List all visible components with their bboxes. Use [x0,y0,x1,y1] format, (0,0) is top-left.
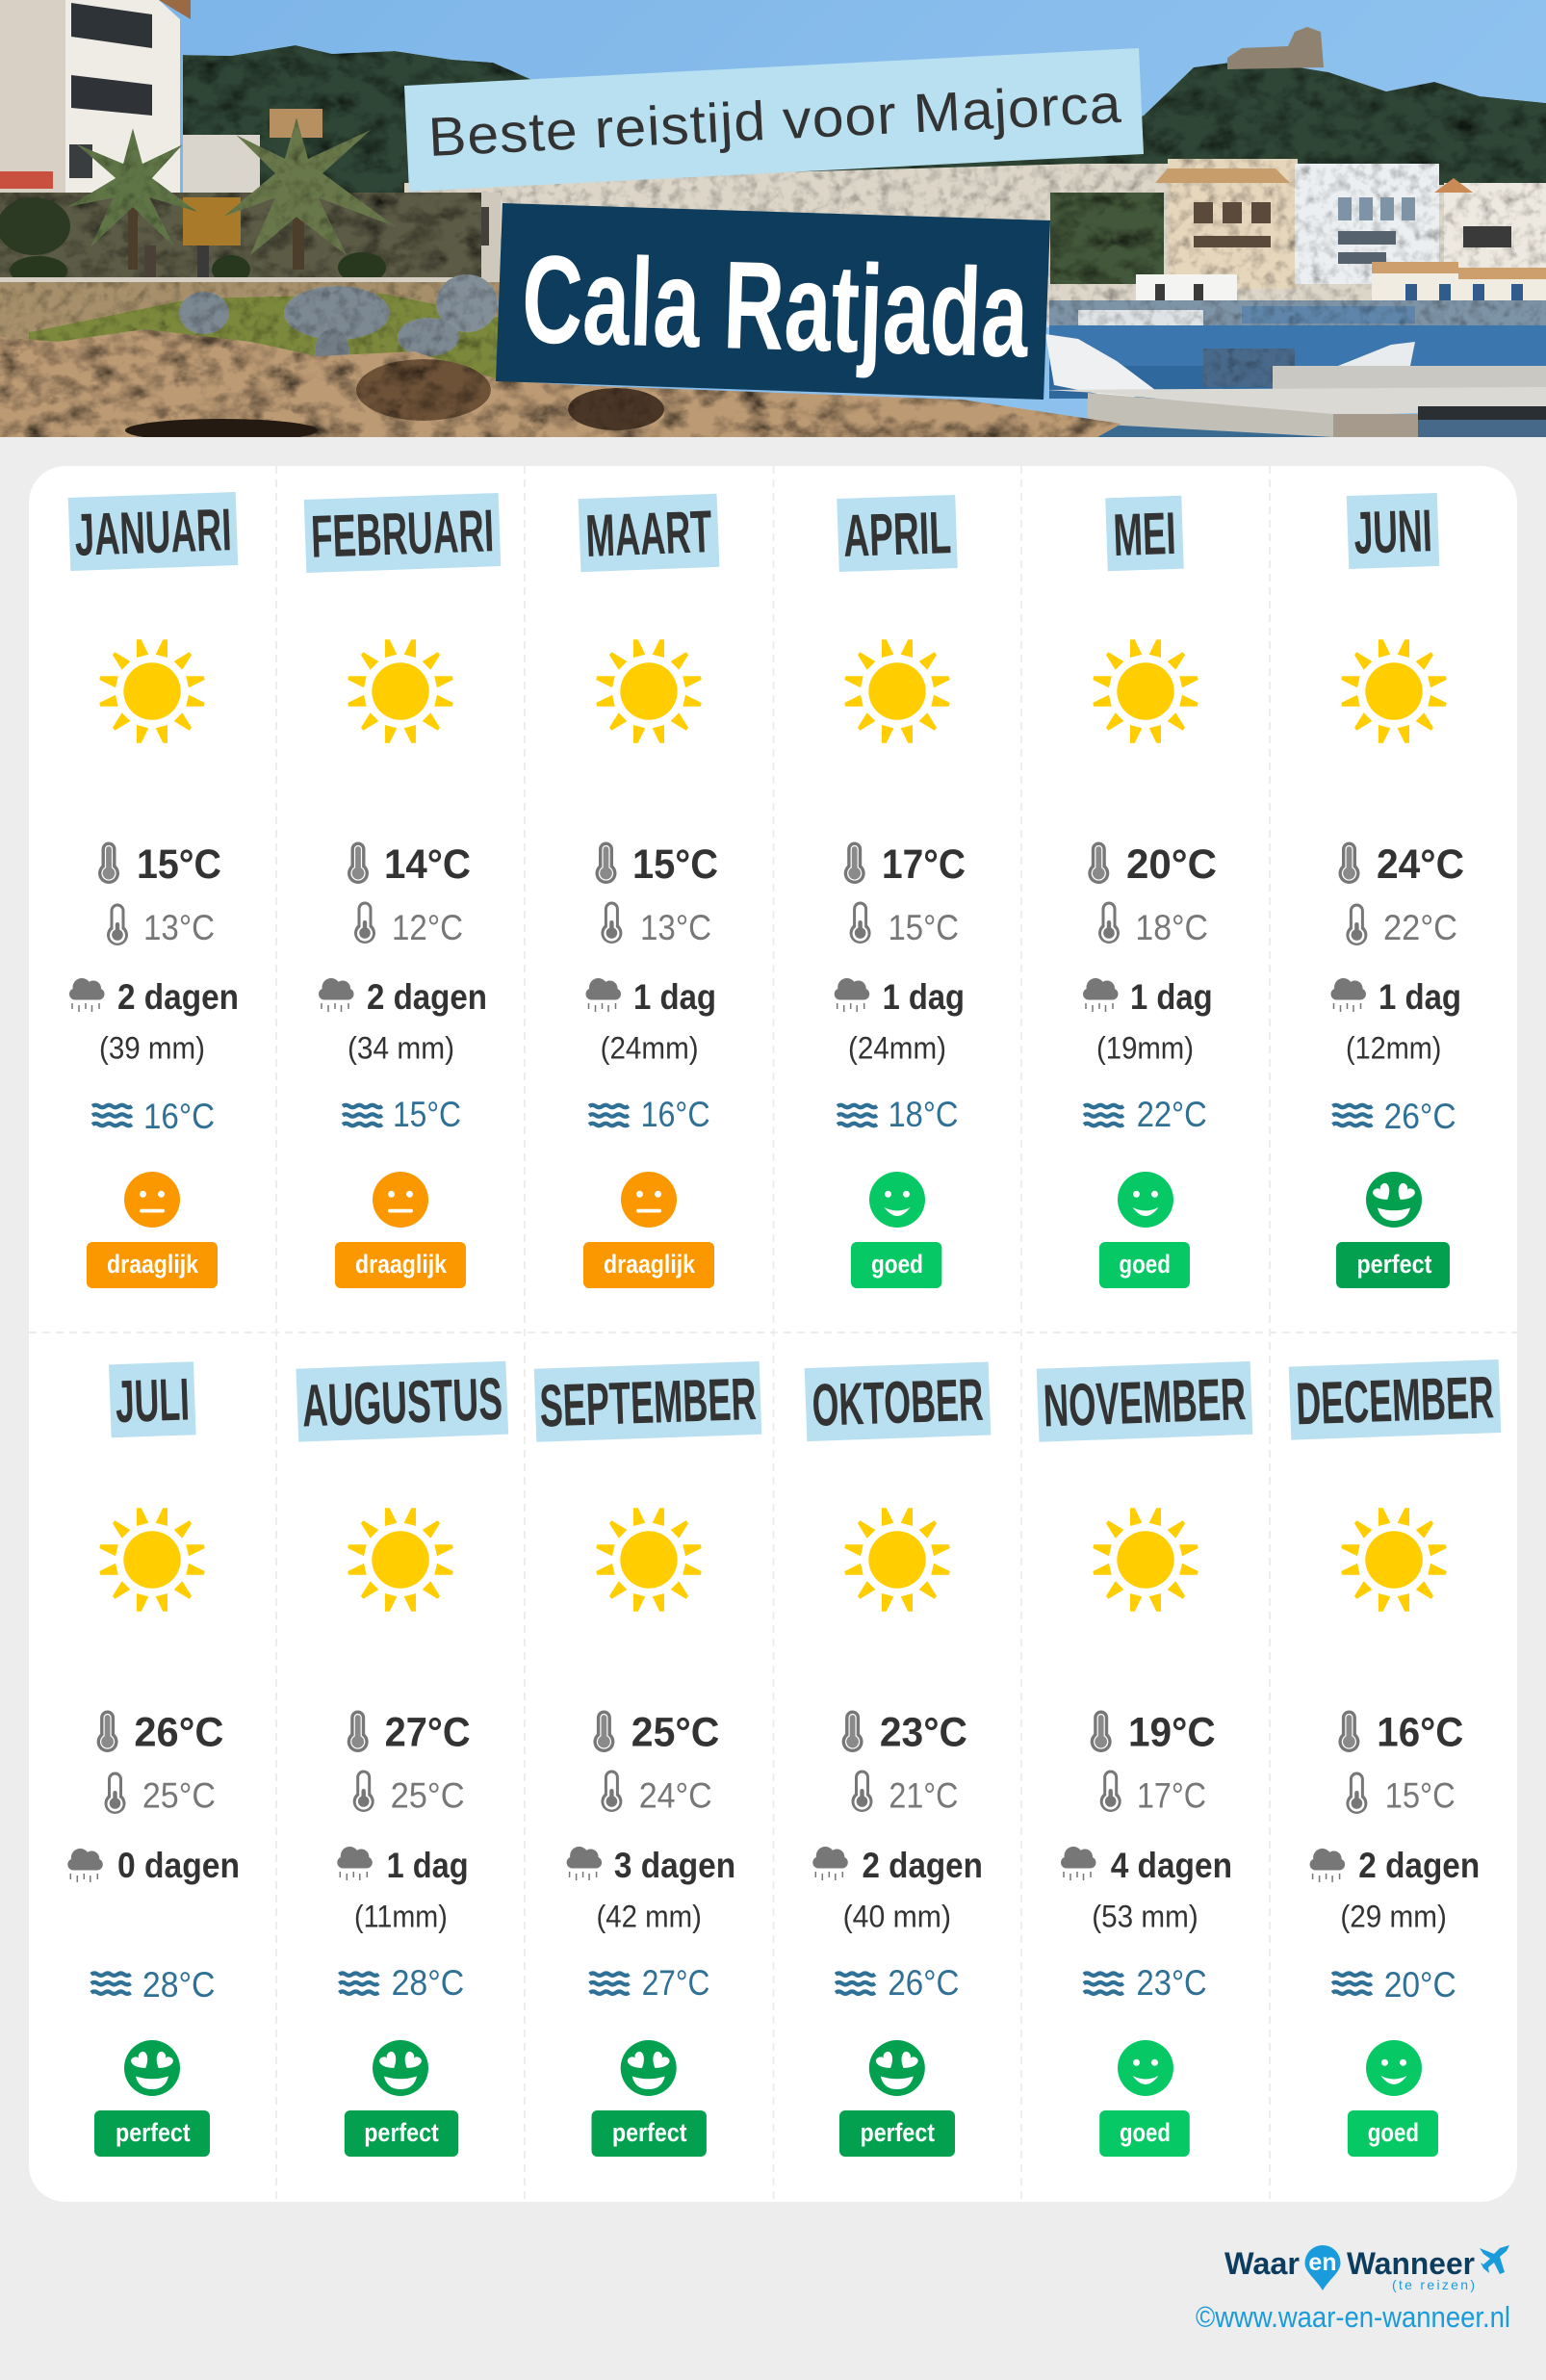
icon: rain cloud [1083,978,1119,1012]
icon: rain cloud [567,1847,602,1880]
badge: goed [851,1242,941,1288]
icon: rain cloud [67,1849,103,1882]
rainfall: (29 mm) [1340,1900,1447,1934]
badge: goed: goed [871,1250,923,1279]
icon: thermometer high [348,1710,369,1752]
sea temperature: 15°C [393,1095,461,1134]
heading: maart [579,494,719,572]
logo: Waar en Wanneer: (te reizen) [1392,2277,1475,2292]
min temperature: 25°C [391,1776,465,1816]
icon: sun [99,639,205,743]
icon: sun [1341,639,1447,743]
rainfall: (24mm) [848,1030,946,1065]
heading: mei [1105,496,1184,571]
month: juli [67,1361,240,2157]
icon: waves [91,1973,131,1994]
icon: rain cloud [585,978,621,1012]
icon: rain cloud [337,1847,373,1880]
icon: sun [1093,639,1198,743]
rainfall: (34 mm) [348,1030,454,1065]
rainfall: (11mm) [354,1900,448,1934]
badge: perfect [591,2110,707,2157]
rain days: 2 dagen [117,977,239,1017]
icon: smiling face [869,1172,925,1228]
sea temperature: 16°C [641,1095,710,1134]
icon: thermometer low [601,1770,622,1812]
month: maart [579,494,719,1288]
min temperature: 24°C [639,1776,712,1816]
min temperature: 18°C [1135,908,1208,947]
month: april [835,495,966,1288]
icon: sun [1093,1508,1198,1612]
heading: juli: JULI [115,1366,191,1436]
max temperature: 15°C [137,841,221,888]
icon: waves [1084,1105,1123,1125]
icon: heart-eyes face [124,2040,180,2096]
icon: heart-eyes face [1366,1172,1422,1228]
heading: juli [109,1361,196,1437]
sea temperature: 27°C [642,1963,709,2003]
icon: thermometer low [107,903,128,945]
rain days: 1 dag [633,977,716,1017]
icon: thermometer low [850,901,871,944]
badge: perfect [94,2110,210,2157]
logo: Waar en Wanneer [1224,2245,1509,2292]
rainfall: (19mm) [1096,1030,1194,1065]
heading: januari [68,492,238,571]
icon: thermometer low [1100,1770,1121,1812]
month: september [534,1361,761,2157]
icon: sun [596,639,702,743]
badge: perfect: perfect [612,2118,687,2147]
icon: map pin: en [1308,2249,1337,2276]
heading: augustus: AUGUSTUS [301,1366,503,1439]
rain days: 3 dagen [614,1846,735,1885]
rainfall: (40 mm) [843,1900,951,1934]
icon: sun [844,1508,950,1612]
min temperature: 12°C [392,908,463,947]
icon: thermometer high [844,841,865,884]
max temperature: 19°C [1128,1710,1216,1756]
icon: neutral face [373,1172,428,1228]
max temperature: 14°C [384,841,471,888]
rainfall: (12mm) [1346,1030,1441,1065]
icon: thermometer high [595,841,616,884]
icon: smiling face [1118,2040,1173,2096]
heading: augustus [296,1361,508,1442]
icon: waves [343,1105,382,1125]
header photo: harbour of Cala Ratjada [0,0,1546,442]
badge: draaglijk [87,1242,218,1288]
min temperature: 15°C [888,908,959,947]
icon: thermometer high [1088,841,1109,884]
icon: neutral face [621,1172,677,1228]
badge: draaglijk: draaglijk [355,1250,448,1279]
badge: goed: goed [1120,2118,1171,2147]
badge: goed: goed [1368,2118,1419,2147]
icon: sun [99,1508,205,1612]
icon: neutral face [124,1172,180,1228]
icon: thermometer high [98,841,119,884]
badge: perfect [345,2110,458,2157]
panel: monthly climate table [29,466,1517,2202]
sea temperature: 16°C [143,1097,215,1136]
badge: draaglijk [335,1242,466,1288]
badge: perfect: perfect [861,2118,935,2147]
badge: perfect: perfect [364,2118,439,2147]
badge: perfect [1336,1242,1450,1288]
heading: april [837,495,958,572]
month: januari [68,492,239,1288]
icon: rain cloud [1310,1849,1345,1882]
min temperature: 13°C [143,908,215,947]
rain days: 1 dag [883,977,965,1017]
sea temperature: 26°C [888,1963,959,2003]
heading: mei: MEI [1112,501,1177,569]
sea temperature: 28°C [392,1963,464,2003]
month: augustus [296,1361,508,2157]
icon: thermometer low [104,1772,125,1814]
icon: map pin [1305,2245,1340,2290]
badge: goed [1099,1242,1190,1288]
badge: perfect: perfect [116,2118,191,2147]
sea temperature: 26°C [1384,1097,1456,1136]
rain days: 2 dagen [367,977,487,1017]
badge: perfect [839,2110,955,2157]
heading: september [534,1361,761,1442]
heading: januari: JANUARI [73,497,233,569]
icon: waves [1332,1105,1372,1125]
heading: november: NOVEMBER [1043,1366,1247,1440]
icon: waves [339,1973,378,1994]
website credit: ©www.waar-en-wanneer.nl [1196,2300,1510,2334]
icon: airplane [1480,2245,1509,2274]
icon: thermometer high [593,1710,614,1752]
month: februari [304,493,501,1288]
icon: waves [1084,1973,1123,1994]
icon: waves [589,1973,630,1994]
icon: waves [836,1973,875,1994]
min temperature: 25°C [142,1776,216,1816]
heading: februari: FEBRUARI [310,498,495,571]
heading: februari [304,493,501,573]
rain days: 1 dag [1130,977,1213,1017]
heading: oktober [805,1361,991,1441]
icon: thermometer high [1338,1710,1359,1752]
min temperature: 17°C [1137,1776,1206,1816]
sea temperature: 22°C [1137,1095,1207,1134]
icon: rain cloud [69,978,104,1012]
month: december [1289,1359,1501,2157]
icon: smiling face [1366,2040,1422,2096]
sea temperature: 28°C [142,1965,216,2005]
heading: juni [1347,493,1439,569]
icon: rain cloud [1330,978,1366,1012]
sea temperature: 20°C [1384,1965,1456,2005]
icon: thermometer low [353,1770,374,1812]
badge: goed: goed [1119,1250,1171,1279]
max temperature: 26°C [134,1710,223,1756]
min temperature: 21°C [889,1776,958,1816]
heading: oktober: OKTOBER [811,1367,985,1439]
banner: subtitle [404,48,1144,192]
heading: maart: MAART [584,499,713,570]
icon: thermometer high [348,841,369,884]
icon: heart-eyes face [869,2040,925,2096]
banner: title: Cala Ratjada [520,228,1031,384]
icon: rain cloud [319,978,354,1012]
icon: sun [844,639,950,743]
rainfall: (53 mm) [1092,1900,1198,1934]
month: mei [1083,496,1217,1288]
max temperature: 17°C [882,841,966,888]
icon: heart-eyes face [621,2040,677,2096]
heading: april: APRIL [842,500,952,570]
icon: rain cloud [835,978,869,1012]
icon: sun [596,1508,702,1612]
icon: sun [1341,1508,1447,1612]
icon: thermometer high [842,1710,863,1752]
icon: smiling face [1118,1172,1173,1228]
sub: palm trees [0,117,395,270]
max temperature: 24°C [1377,841,1464,888]
icon: waves [589,1105,629,1125]
sea temperature: 18°C [888,1095,959,1134]
rain days: 0 dagen [117,1846,240,1885]
icon: waves [92,1105,132,1125]
heading: juni: JUNI [1353,498,1433,567]
month: oktober [805,1361,991,2157]
heading: september: SEPTEMBER [538,1366,758,1440]
badge: perfect: perfect [1356,1250,1431,1279]
min temperature: 13°C [640,908,711,947]
badge: draaglijk [583,1242,714,1288]
icon: heart-eyes face [373,2040,428,2096]
badge: draaglijk: draaglijk [107,1250,199,1279]
rain days: 4 dagen [1111,1846,1232,1885]
icon: thermometer low [851,1770,872,1812]
rain days: 2 dagen [863,1846,983,1885]
icon: sun [348,639,453,743]
badge: goed [1099,2110,1190,2157]
month: november [1037,1361,1252,2157]
month: juni [1330,493,1464,1288]
heading: november [1037,1361,1252,1442]
badge: goed [1348,2110,1438,2157]
max temperature: 25°C [631,1710,719,1756]
min temperature: 15°C [1385,1776,1456,1816]
rain days: 1 dag [1379,977,1461,1017]
icon: thermometer high [1338,841,1359,884]
icon: rain cloud [1061,1847,1095,1880]
rainfall: (24mm) [601,1030,699,1065]
icon: waves [1332,1973,1372,1994]
sea temperature: 23°C [1136,1963,1207,2003]
max temperature: 20°C [1126,841,1217,888]
max temperature: 23°C [880,1710,967,1756]
icon: thermometer low [354,901,375,944]
rainfall: (42 mm) [597,1900,702,1934]
icon: thermometer high [1091,1710,1112,1752]
banner: title [496,203,1050,400]
icon: thermometer low [1346,1772,1367,1814]
logo: Waar en Wanneer: Waar [1224,2246,1300,2281]
rain days: 1 dag [387,1846,469,1885]
max temperature: 15°C [632,841,718,888]
icon: thermometer high [97,1710,118,1752]
max temperature: 16°C [1377,1710,1463,1756]
rain days: 2 dagen [1358,1846,1480,1885]
rainfall: (39 mm) [99,1030,205,1065]
icon: thermometer low [1346,903,1367,945]
icon: thermometer low [601,901,622,944]
badge: draaglijk: draaglijk [604,1250,696,1279]
icon: sun [348,1508,453,1612]
max temperature: 27°C [385,1710,471,1756]
logo: Waar en Wanneer: Wanneer [1347,2246,1475,2281]
banner: subtitle: Beste reistijd voor Majorca [427,73,1123,168]
icon: waves [837,1105,877,1125]
icon: thermometer low [1098,901,1120,944]
icon: rain cloud [812,1847,848,1880]
min temperature: 22°C [1383,908,1457,947]
